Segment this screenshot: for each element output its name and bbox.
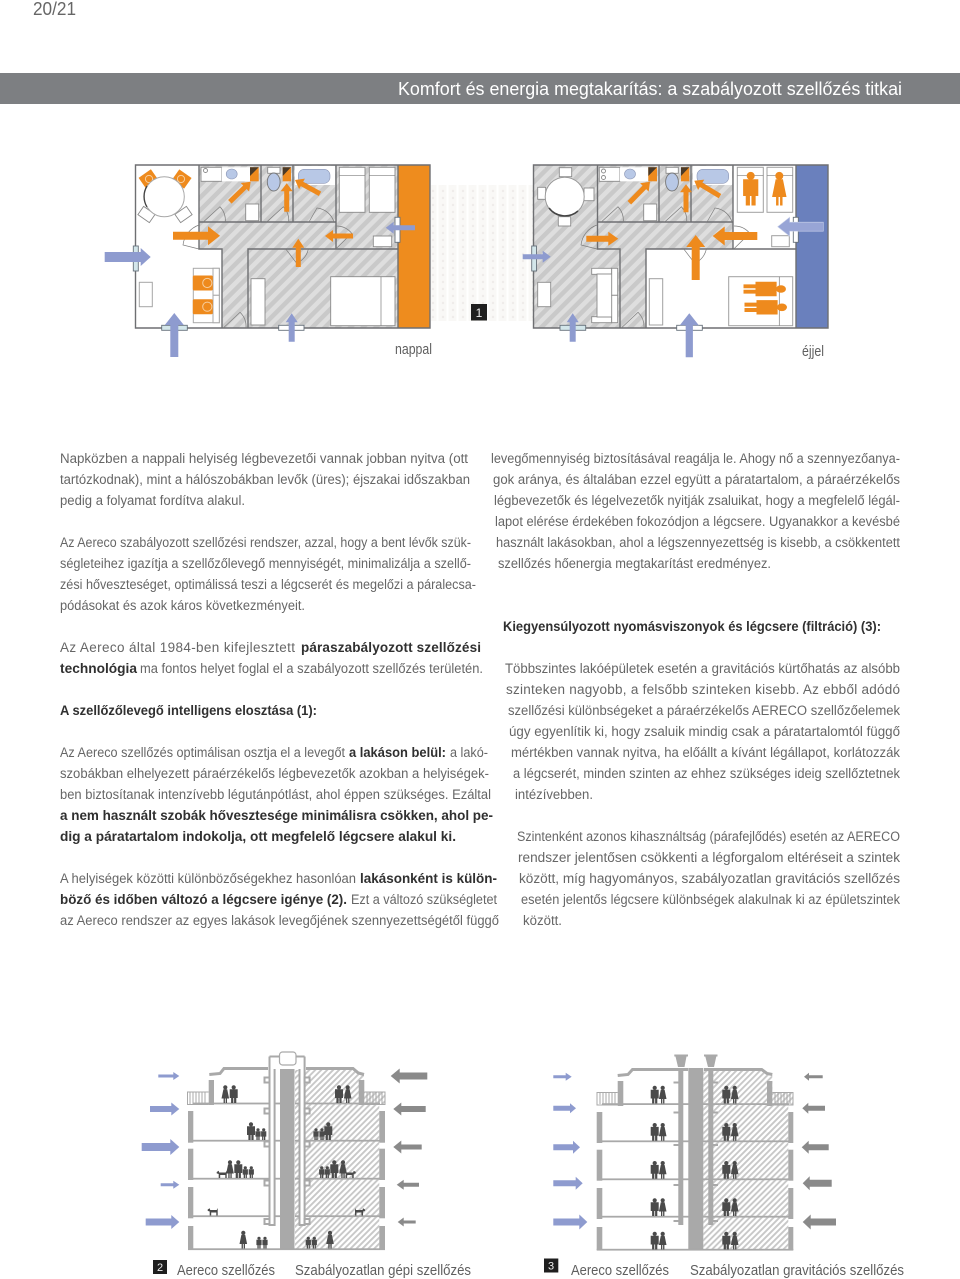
grey inflow arrows [802,1073,836,1230]
floor plan: night [523,165,828,357]
figure 1 number badge: 1 [476,306,483,320]
paragraph: same occupancy: esetén jelentős légcsere különbségek alakulnak ki az épületszintek [521,892,900,907]
paragraph: continued: légbevezetők és légelvezetők nyitják zsaluikat, hogy a megfelelő légál- [494,493,900,508]
paragraph: humidity technology: páraszabályozott szellőzési [301,640,481,655]
paragraph: within the flat [60,745,493,844]
roof [618,1070,772,1076]
window vents [532,217,798,330]
paragraph: continued: lapot elérése érdekében fokozódjon a légcsere. Ugyanakkor a kevésbé [495,514,900,529]
central shaft [280,1069,294,1249]
paragraph: between flats [60,871,499,928]
paragraph: regulated system: pódásokat és azok káros következményeit. [60,598,305,613]
building section 2 [142,1052,427,1250]
blue inflow arrows [142,1072,179,1229]
hatched unregulated side [703,1070,793,1250]
dining table with chairs [138,169,192,223]
paragraph: day and night: pedig a folyamat fordítva alakul. [60,493,245,508]
window vents [133,217,400,330]
header band [0,73,960,104]
paragraph: multi-storey buildings: intézívebben. [515,787,593,802]
paragraph: multi-storey buildings: a légcserét, minden szinten az ehhez szükséges ideig szellőztetnek [513,766,900,781]
beds with sleeping people [649,167,793,326]
paragraph: within the flat: szobákban elhelyezett páraérzékelős légbevezetők azokban a helyiségek- [60,766,489,781]
dining table with chairs [538,168,594,226]
legend 2: 2 [157,1262,163,1274]
heading: balanced pressure: Kiegyensúlyozott nyomásviszonyok és légcsere (filtráció) (3): [503,619,881,634]
paragraph: multi-storey buildings: Többszintes lakóépületek esetén a gravitációs kürtőhatás az alsóbb [505,661,900,676]
people on floors [208,1085,365,1248]
paragraph: within the flat: a lakó- [450,745,488,760]
doors [183,207,352,328]
page title: Komfort és energia megtakarítás: a szabályozott szellőzés titkai [398,79,902,99]
floors and walls [597,1081,793,1251]
paragraph: between flats: lakásonként is külön- [360,871,497,886]
paragraph: continued: levegőmennyiség biztosításával reagálja le. Ahogy nő a szennyezőanya- [491,451,900,466]
doors [581,207,750,328]
paragraph: within the flat: a lakáson belül: [349,745,446,760]
paragraph: within the flat: a nem használt szobák hővesztesége minimálisra csökken, ahol pe- [60,808,493,823]
paragraph: regulated system: zési hőveszteséget, optimálissá teszi a légcserét és megelőzi a páralecsa- [60,577,476,592]
building section 3 [553,1054,836,1251]
figure 1 number badge [471,304,487,320]
paragraph: same occupancy: rendszer jelentősen csökkenti a légforgalom eltéréseit a szintek [518,850,900,865]
paragraph: day and night: tartózkodnak), mint a hálószobákban levők (üres); éjszakai időszakban [60,472,470,487]
legend 3: 3 [548,1260,554,1272]
paragraph: same occupancy: Szintenként azonos kihasználtság (párafejlődés) esetén az AERECO [517,829,900,844]
floor plan: day [105,165,430,357]
legend 3 [544,1258,904,1279]
legend 3: Szabályozatlan gravitációs szellőzés [690,1263,904,1279]
balconies [188,1092,385,1105]
paragraph: within the flat: ben biztosítanak intenzívebb légutánpótlást, ahol éppen szükséges. Ezáltal [60,787,491,802]
legend 2: Aereco szellőzés [177,1263,275,1279]
paragraph: regulated system: Az Aereco szabályozott szellőzési rendszer, azzal, hogy a bent lévők szük- [60,535,471,550]
airflow arrows: extract air [586,176,757,280]
paragraph: between flats: az Aereco rendszer az egyes lakások levegőjének szennyezettségétől függő [60,913,499,928]
paragraph: day and night: Napközben a nappali helyiség légbevezetői vannak jobban nyitva (ott [60,451,468,466]
paragraph: continued: használt lakásokban, ahol a légszennyezettség is kisebb, a csökkentett [496,535,900,550]
paragraph: continued [491,451,900,571]
caption: night: éjjel [802,344,824,360]
heading: intelligent distribution: A szellőzőlevegő intelligens elosztása (1): [60,703,317,718]
dotted texture between floor plans [431,185,534,321]
legend 3: Aereco szellőzés [571,1263,669,1279]
paragraph: same occupancy [517,829,900,928]
paragraph: multi-storey buildings: szinteken nagyobb, a felsőbb szinteken kisebb. Az ebből adódó [506,682,900,697]
central shaft [688,1068,703,1250]
airflow arrows: extract air [173,175,353,267]
text column: left [60,451,499,928]
bathroom fixtures [599,166,732,221]
paragraph: between flats: Ezt a változó szükségletet [351,892,497,907]
text column: right [491,451,900,928]
paragraph: same occupancy: között. [523,913,562,928]
paragraph: multi-storey buildings: mértékben vannak nyitva, ha előállt a kívánt légállapot, korlátozzák [511,745,900,760]
paragraph: same occupancy: között, míg hagyományos, szabályozatlan gravitációs szellőzés [519,871,900,886]
legend 2 [153,1260,471,1279]
bathroom fixtures [201,166,335,221]
paragraph: humidity technology: Az Aereco által 1984-ben kifejlesztett [60,640,295,655]
paragraph: between flats: A helyiségek közötti különbözőségekhez hasonlóan [60,871,356,886]
paragraph: between flats: böző és időben változó a légcsere igénye (2). [60,892,347,907]
orange sun-side strip [398,165,430,328]
people on floors [651,1086,738,1250]
paragraph: regulated system: ségleteihez igazítja a szellőzőlevegő mennyiségét, minimalizálja a szellő- [60,556,471,571]
airflow arrows: supply air [523,217,823,357]
paragraph: day and night [60,451,470,508]
paragraph: humidity technology: technológia [60,661,137,676]
caption: day: nappal [395,342,432,358]
paragraph: regulated system [60,535,476,613]
sofa with seated people [193,268,219,323]
paragraph: within the flat: dig a páratartalom indokolja, ott megfelelő légcsere alakul ki. [60,829,456,844]
beds and furniture [139,167,395,326]
hatched unregulated side [295,1070,385,1249]
blue inflow arrows [553,1073,587,1230]
walls [534,165,828,328]
living room furniture [538,268,618,323]
floors and walls [188,1080,385,1250]
paragraph: multi-storey buildings: szellőzési különbségeket a páraérzékelős AERECO szellőzőelemek [508,703,900,718]
paragraph: multi-storey buildings: úgy egyenlítik ki, hogy zsaluik mindig csak a páratartalomtól függő [509,724,900,739]
airflow arrows: supply air [105,222,415,357]
paragraph: within the flat: Az Aereco szellőzés optimálisan osztja el a levegőt [60,745,345,760]
paragraph: multi-storey buildings [505,661,900,802]
roof [209,1068,364,1074]
walls [136,165,430,328]
balconies [597,1092,793,1106]
paragraph: humidity technology: ma fontos helyet foglal el a szabályozott szellőzés területén. [140,661,483,676]
blue night-side strip [796,165,828,328]
paragraph: continued: szellőzés hőenergia megtakarítást eredményez. [498,556,771,571]
ducts with chimney caps [674,1054,718,1225]
legend 2: Szabályozatlan gépi szellőzés [295,1263,471,1279]
grey inflow arrows [391,1068,427,1226]
ventilation ducts with fan [264,1052,310,1225]
paragraph: humidity technology [60,640,483,676]
paragraph: continued: gok aránya, és általában ezzel együtt a páratartalom, a páraérzékelős [493,472,900,487]
